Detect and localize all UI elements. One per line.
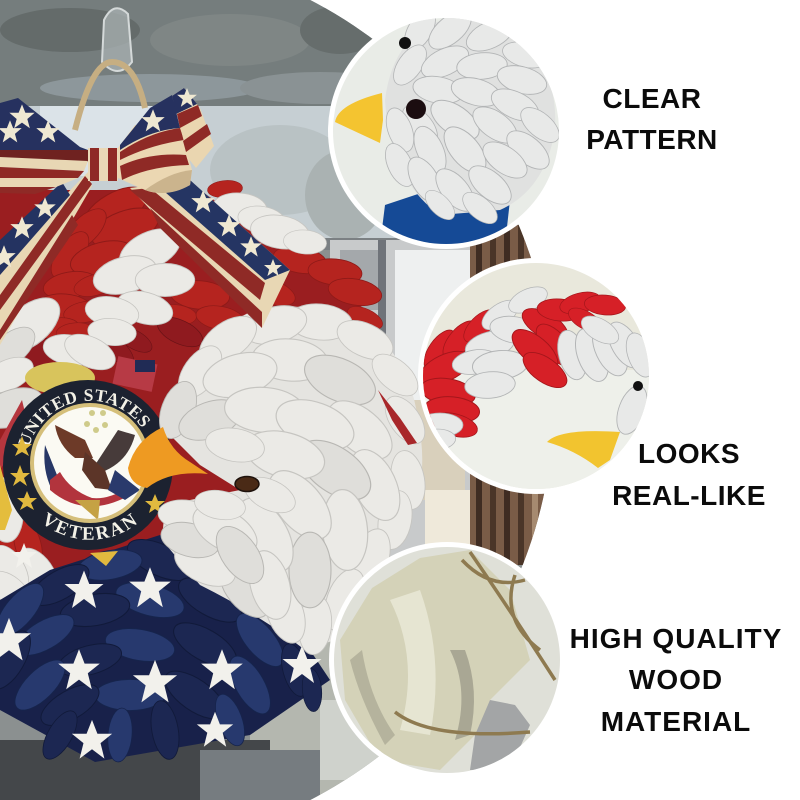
detail circle: clear pattern	[328, 4, 565, 250]
eagle beak	[128, 427, 208, 488]
head base	[162, 306, 422, 650]
yellow beak	[547, 431, 620, 468]
label: high quality wood material: WOOD	[629, 664, 723, 695]
left loop	[0, 98, 88, 194]
seal emblem	[44, 410, 140, 520]
navy feathers	[0, 531, 330, 764]
eagle head	[152, 299, 433, 656]
label: looks real-like: REAL-LIKE	[612, 480, 766, 511]
seal gold stars	[10, 436, 165, 566]
detail circle: looks real-like	[413, 258, 659, 494]
veteran seal	[3, 380, 172, 566]
right tail	[130, 180, 290, 328]
right loop	[118, 88, 214, 193]
pale window pane	[2, 106, 400, 250]
eagle eye	[235, 476, 259, 492]
wreath arc feathers	[423, 286, 649, 448]
label: clear pattern: PATTERN	[586, 124, 718, 155]
suction hook	[102, 8, 132, 71]
right bright window area	[330, 240, 475, 570]
metal cutout	[470, 700, 530, 770]
wreath	[0, 178, 386, 764]
label: high quality wood material: MATERIAL	[601, 706, 751, 737]
detail circle: wood material	[329, 542, 565, 780]
left tail	[0, 172, 92, 345]
veteran seal: VETERAN	[46, 512, 137, 540]
white stars	[0, 543, 322, 759]
label: high quality wood material: HIGH QUALITY	[570, 623, 782, 654]
feather rows	[385, 18, 559, 224]
seal text	[29, 401, 151, 448]
red neck accent	[378, 390, 417, 445]
veteran seal: UNITED STATES	[18, 389, 150, 444]
red feathers	[0, 178, 386, 578]
rolled ribbon end	[172, 88, 214, 168]
label: clear pattern: CLEAR	[603, 83, 701, 114]
beak	[335, 93, 383, 143]
yellow and flag accents behind seal	[0, 356, 157, 530]
twine	[395, 552, 555, 734]
wooden slats	[470, 225, 544, 565]
background photo circle	[0, 0, 544, 800]
wreath base	[0, 190, 380, 570]
wood panel	[340, 550, 530, 770]
navy base	[382, 194, 510, 244]
eye	[406, 99, 426, 119]
twine hanger	[75, 62, 145, 130]
white wreath feathers	[0, 191, 328, 616]
knot	[88, 148, 118, 181]
ribbon bow	[0, 88, 290, 345]
label: looks real-like: LOOKS	[638, 438, 740, 469]
frosted window top band	[0, 0, 400, 106]
lower surroundings	[0, 642, 379, 800]
